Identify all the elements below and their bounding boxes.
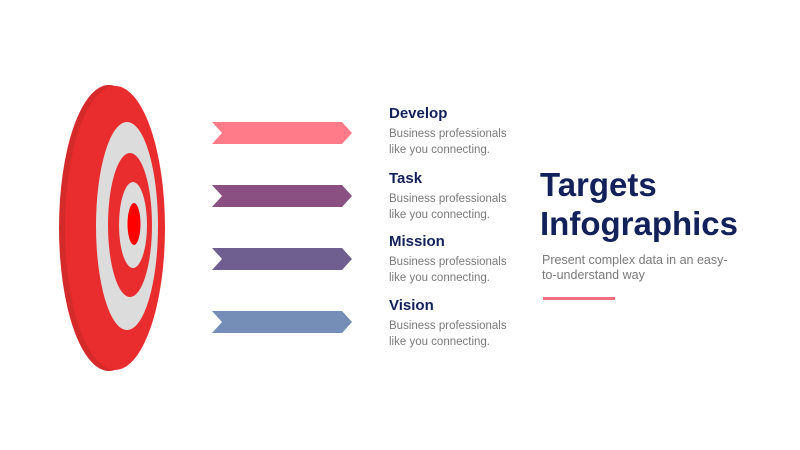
arrow: task (212, 185, 352, 207)
arrow: mission (212, 248, 352, 270)
text: develop body (389, 128, 507, 156)
heading: Task: Task (389, 170, 422, 187)
text: task body (389, 193, 507, 221)
text: develop body: like you connecting. (389, 144, 490, 156)
arrow: develop (212, 122, 352, 144)
text: mission body: like you connecting. (389, 272, 490, 284)
accent line (543, 297, 615, 300)
icon: target (59, 85, 165, 371)
heading: Develop: Develop (389, 105, 447, 122)
text: mission body: Business professionals (389, 256, 507, 268)
text: vision body (389, 320, 507, 348)
target and arrows graphic (59, 85, 352, 371)
heading: Vision: Vision (389, 297, 434, 314)
text: develop body: Business professionals (389, 128, 507, 140)
title: Infographics (540, 205, 738, 242)
text: task body: like you connecting. (389, 209, 490, 221)
text: task body: Business professionals (389, 193, 507, 205)
title (540, 166, 738, 242)
text: vision body: Business professionals (389, 320, 507, 332)
text: mission body (389, 256, 507, 284)
heading: Mission: Mission (389, 233, 445, 250)
subtitle: Present complex data in an easy- (542, 253, 728, 267)
arrow: vision (212, 311, 352, 333)
text: vision body: like you connecting. (389, 336, 490, 348)
title: Targets (540, 166, 657, 203)
subtitle (542, 253, 728, 282)
subtitle: to-understand way (542, 268, 645, 282)
